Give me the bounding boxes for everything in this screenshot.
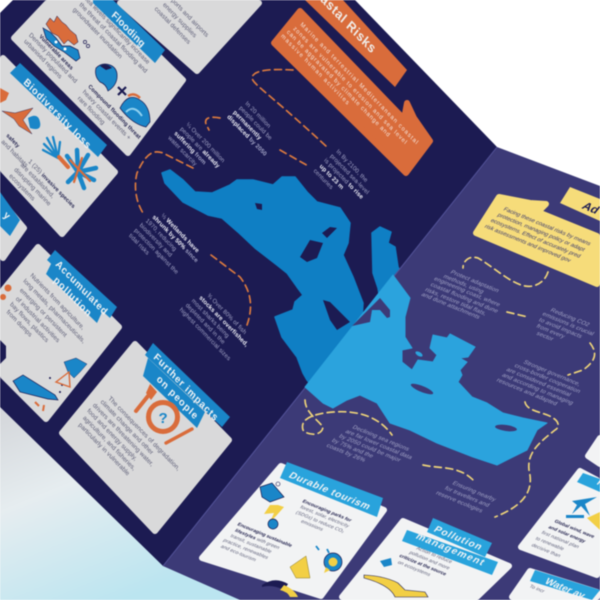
text: ensuring: for travellers and xyxy=(443,486,490,509)
card: flooding xyxy=(14,0,183,153)
ribbon: biodiversity heading xyxy=(10,63,107,157)
card: coastal defenses (top, cropped): coastal defenses xyxy=(153,5,191,46)
text: pollution body: criticize at the source xyxy=(398,553,448,577)
stat: water scarcity xyxy=(166,117,225,182)
ribbon: pollution management heading: Pollution xyxy=(431,525,484,552)
text: adapting intro: ecosystems. Effect of accurately pred xyxy=(489,218,582,259)
text: pollution body xyxy=(393,542,457,583)
icon: coral reef xyxy=(43,137,96,188)
text: wind and solar xyxy=(529,517,596,565)
callout: coastal risks xyxy=(274,0,430,173)
icon: rain cloud and wave xyxy=(96,64,150,127)
ribbon: durable tourism heading: Durable tourism xyxy=(286,471,373,512)
stat: wetlands: shrunk by 50% since xyxy=(151,214,200,265)
icon: fork, plate and knife xyxy=(136,384,192,443)
ribbon: durable tourism heading xyxy=(280,462,383,517)
ribbon: accumulated pollution heading: pollution xyxy=(51,275,93,319)
text: adapting intro xyxy=(483,205,592,266)
text: protect adaptation: coastal flooding and dune xyxy=(429,282,500,315)
ribbon: accumulated pollution heading xyxy=(46,250,117,323)
text: vulnerable areas: Vulnerable areas xyxy=(38,34,74,72)
text: coastal risks intro: Marine and terrestrial Mediterranean coastal xyxy=(299,22,419,146)
stat: fish stocks: ¾ Over 80% of fish xyxy=(206,293,247,336)
stat: water scarcity: suffering from xyxy=(173,130,207,166)
stat: sea level rise: In By 2100, the xyxy=(335,149,369,185)
text: reducing: emissions is crucial xyxy=(541,312,595,337)
yellow speech box xyxy=(476,197,597,284)
text: protect adaptation: Protect adaptation xyxy=(449,270,500,294)
icon: fork, plate and knife: ? xyxy=(158,410,168,427)
text: stronger governance: Stronger governance, xyxy=(522,360,582,388)
icon: yellow bars and sprout xyxy=(262,556,310,597)
text: sustainable lifestyles: lifestyles with green xyxy=(233,528,281,551)
panel: adapting (right page) xyxy=(163,147,600,600)
text: protect adaptation xyxy=(420,266,512,325)
text: declining: by 75% and the xyxy=(330,438,375,460)
text: stronger governance: are considered essential xyxy=(505,367,572,398)
text: declining: by 2050 could be major xyxy=(337,434,402,464)
card: coastal defenses (top, cropped) xyxy=(120,0,259,71)
stat: wetlands: protection against the xyxy=(133,228,179,276)
text: sustainable lifestyles: transit, sustainable xyxy=(229,534,273,555)
text: water body: To incr xyxy=(528,584,546,595)
ribbon: cropped heading: y xyxy=(1,210,12,223)
card: renewable energy xyxy=(521,471,600,575)
text: further impacts body: food and energy supply, xyxy=(86,407,138,463)
text: encouraging parks: forest, solar, electricity xyxy=(298,505,351,529)
stat: wetlands: biodiversity and xyxy=(138,223,173,259)
stat: wetlands xyxy=(127,203,204,288)
text: further impacts body: agriculture, and fisheries, xyxy=(81,414,137,473)
stat: sea level rise: up to 23 m xyxy=(318,163,345,192)
text: compound flooding xyxy=(76,83,141,153)
text: adapting intro: protection, managing policy or adapt xyxy=(496,213,586,253)
text: encouraging parks: emissions xyxy=(299,519,325,533)
callout: adapting xyxy=(476,187,600,284)
text: vulnerable areas: Densely populated and xyxy=(27,32,79,85)
card: accumulated pollution xyxy=(0,247,119,419)
stat: sea level rise: projected sea-level xyxy=(329,153,370,196)
dashed connectors: right page xyxy=(302,257,595,517)
text: flooding intro: groundwater inundation xyxy=(71,6,124,61)
card: coastal defenses (top, cropped): energy supplies xyxy=(161,1,198,40)
text: accumulated pollution body xyxy=(1,271,92,372)
stat: displaced people: In 20 million xyxy=(244,101,271,130)
ribbon: accumulated pollution heading: Accumulated xyxy=(53,259,109,318)
text: accumulated pollution body: Nutrients from agriculture, xyxy=(29,272,86,332)
text: stronger governance: and according to managing xyxy=(500,373,574,406)
text: declining: coasts by 26% xyxy=(325,443,367,464)
stat: displaced people xyxy=(226,97,282,158)
map: mediterranean, right page xyxy=(305,275,547,465)
icon: plastic bottle and debris xyxy=(0,284,63,411)
text: protect adaptation: engineering coast, where xyxy=(432,277,502,308)
ribbon: pollution management heading: management xyxy=(413,532,487,568)
text: declining: Declining sea regions xyxy=(351,425,410,453)
text blocks: left page statistics xyxy=(127,97,374,366)
text: declining: are far lower coastal data xyxy=(344,429,414,461)
text: protect adaptation: methods, using xyxy=(442,274,485,295)
text: declining xyxy=(325,421,418,478)
text: wind and solar: decisive than xyxy=(530,543,562,559)
text: accumulated pollution body: of industrial activities xyxy=(14,295,61,344)
text: coastal risks intro: massive human activities xyxy=(280,33,350,106)
text: reducing: Reducing CO2 xyxy=(549,308,591,328)
stat: water scarcity: water scarcity xyxy=(166,134,197,168)
card: pollution management xyxy=(342,518,509,597)
icon: wind turbine xyxy=(566,497,600,530)
text blocks: right page xyxy=(325,266,599,515)
stat: water scarcity: people are already xyxy=(179,126,221,170)
stat: displaced people: displaced by 2050 xyxy=(226,113,268,158)
text: protect adaptation: risks, restore tidal flats, xyxy=(423,288,488,317)
stat: fish stocks: most sharks being xyxy=(190,298,230,340)
card: durable tourism xyxy=(202,462,384,597)
text: wind and solar: Global wind, wave xyxy=(553,519,596,540)
map: mediterranean, left page xyxy=(162,170,410,395)
text: reducing xyxy=(527,306,599,354)
text: sustainable lifestyles: practice, renewables xyxy=(222,538,270,561)
stat: fish stocks: highest commercial sizes xyxy=(178,307,231,363)
stat: wetlands: 1970, reducing xyxy=(144,218,177,253)
text: accumulated pollution body: from dumps xyxy=(5,309,33,339)
text: further impacts body xyxy=(76,389,181,504)
text: pollution body: Action to reduce xyxy=(415,546,453,565)
ribbon: coastal risks heading xyxy=(305,0,407,87)
stat: sea level rise: is projected to rise xyxy=(323,157,365,201)
stat: sea level rise: centuries xyxy=(312,168,334,191)
text: encouraging parks xyxy=(288,499,355,540)
text: wind and solar: to renewable xyxy=(534,536,565,552)
text: further impacts body: drivers are threatening water, xyxy=(91,402,155,468)
icon: polluted river xyxy=(364,558,428,597)
text: ensuring xyxy=(434,478,497,515)
background table surface xyxy=(0,400,245,600)
text: wind and solar: and solar energy xyxy=(547,525,587,544)
icon: blue tree and warning triangle xyxy=(56,358,87,387)
text: encouraging parks: Encouraging parks for xyxy=(301,499,353,523)
text: biodiversity species: disrupting marine xyxy=(13,166,52,208)
text: sustainable lifestyles: Encouraging sustainable xyxy=(236,522,293,549)
stat: fish stocks xyxy=(178,284,253,366)
ribbon: flooding heading: Flooding xyxy=(109,10,147,50)
text: adapting intro: risk assessments and improved gov xyxy=(483,224,572,264)
text: coastal risks intro: can be aggravated by climate change and xyxy=(285,29,390,138)
text: adapting intro: Facing these coastal risks by means xyxy=(502,207,592,247)
text: biodiversity species: are established, xyxy=(19,161,56,200)
text: biodiversity species: 1 (25) invasive species xyxy=(27,158,76,210)
text: wind and solar: first national plan xyxy=(540,530,580,550)
stat: displaced people: people could be xyxy=(238,105,273,142)
icon: award badge xyxy=(316,546,342,573)
text: biodiversity note left: and habitats xyxy=(0,138,29,169)
text: accumulated pollution body: long metals, pharmaceuticals, xyxy=(22,278,86,345)
panel: coastal risks (left page) xyxy=(0,0,497,566)
text: further impacts body: climate change and other xyxy=(99,398,154,456)
text: coastal risks intro: zones are vulnerable to erosion and sea level xyxy=(292,26,407,146)
text: ensuring: Ensuring nearby xyxy=(451,481,497,503)
icon: bulb, bolt and plug xyxy=(260,482,284,529)
text: flooding intro: the threat of coastal flooding and xyxy=(78,1,149,75)
text: reducing: from every xyxy=(535,324,566,340)
stat: sea level rise xyxy=(312,145,374,214)
orange speech box xyxy=(274,11,430,173)
ribbon: further impacts heading: Further impacts xyxy=(151,352,220,424)
card: water availability xyxy=(512,570,600,600)
stat: wetlands: tidal risks xyxy=(127,233,150,257)
stat: displaced people: permanently xyxy=(232,109,263,142)
card: further impacts on people xyxy=(62,343,230,531)
card: cropped left card xyxy=(0,192,24,258)
text: biodiversity species xyxy=(8,154,76,229)
text: stronger governance: resources and adapted xyxy=(495,378,558,407)
text: compound flooding: rare flooding xyxy=(76,95,106,127)
text: ensuring: reserve ecologies xyxy=(434,491,484,514)
text: protect adaptation: and dune attachments xyxy=(420,292,481,321)
fold highlight xyxy=(163,147,497,566)
text: compound flooding: heavy coastal events + xyxy=(81,89,132,142)
stat: fish stocks: stocks are overfished, xyxy=(198,294,249,349)
stat: wetlands: ½ Wetlands have xyxy=(160,212,200,255)
text: accumulated pollution body: bay flows, plastics xyxy=(8,301,50,344)
text: vulnerable areas: urbanised regions xyxy=(22,38,63,81)
card: cropped top right xyxy=(588,438,600,464)
text: encouraging parks: (SDGs) to reduce CO₂ xyxy=(294,510,346,534)
icon: flooded houses xyxy=(43,16,90,61)
text: biodiversity note left: safety xyxy=(5,133,21,150)
stat: fish stocks: depleted and in the xyxy=(184,303,226,346)
ribbon: flooding heading xyxy=(93,0,165,63)
text: further impacts body: The consequences of degradation, xyxy=(107,395,181,473)
card: biodiversity loss xyxy=(0,58,115,234)
text: stronger governance xyxy=(495,356,588,412)
ribbon: biodiversity heading: Biodiversity loss xyxy=(21,77,93,152)
text: accumulated pollution body: emerging or persistent xyxy=(18,287,68,339)
text: biodiversity species: ecosystems xyxy=(8,173,36,203)
text: pollution body: on ecosystems xyxy=(396,560,432,578)
ribbon: further impacts heading: on people xyxy=(154,374,200,422)
ribbon: further impacts heading xyxy=(143,343,230,428)
text: reducing: sector xyxy=(535,331,555,342)
ribbon: pollution management heading xyxy=(402,518,498,575)
dashed connectors: left page xyxy=(135,70,327,325)
text: compound flooding: Compound flooding threat xyxy=(87,84,141,141)
icon: starfish xyxy=(0,88,40,134)
text: further impacts body: particularly in vulnerable xyxy=(77,421,131,478)
text: stronger governance: cross-border cooperation xyxy=(513,363,581,395)
text: reducing: to avoid impacts xyxy=(537,318,583,340)
text: pollution body: pollution and more xyxy=(408,550,451,571)
stat: water scarcity: ¼ Over 200 million xyxy=(185,122,225,164)
text: sustainable lifestyles xyxy=(217,522,293,571)
text: sustainable lifestyles: and eco-tourism xyxy=(219,544,257,563)
